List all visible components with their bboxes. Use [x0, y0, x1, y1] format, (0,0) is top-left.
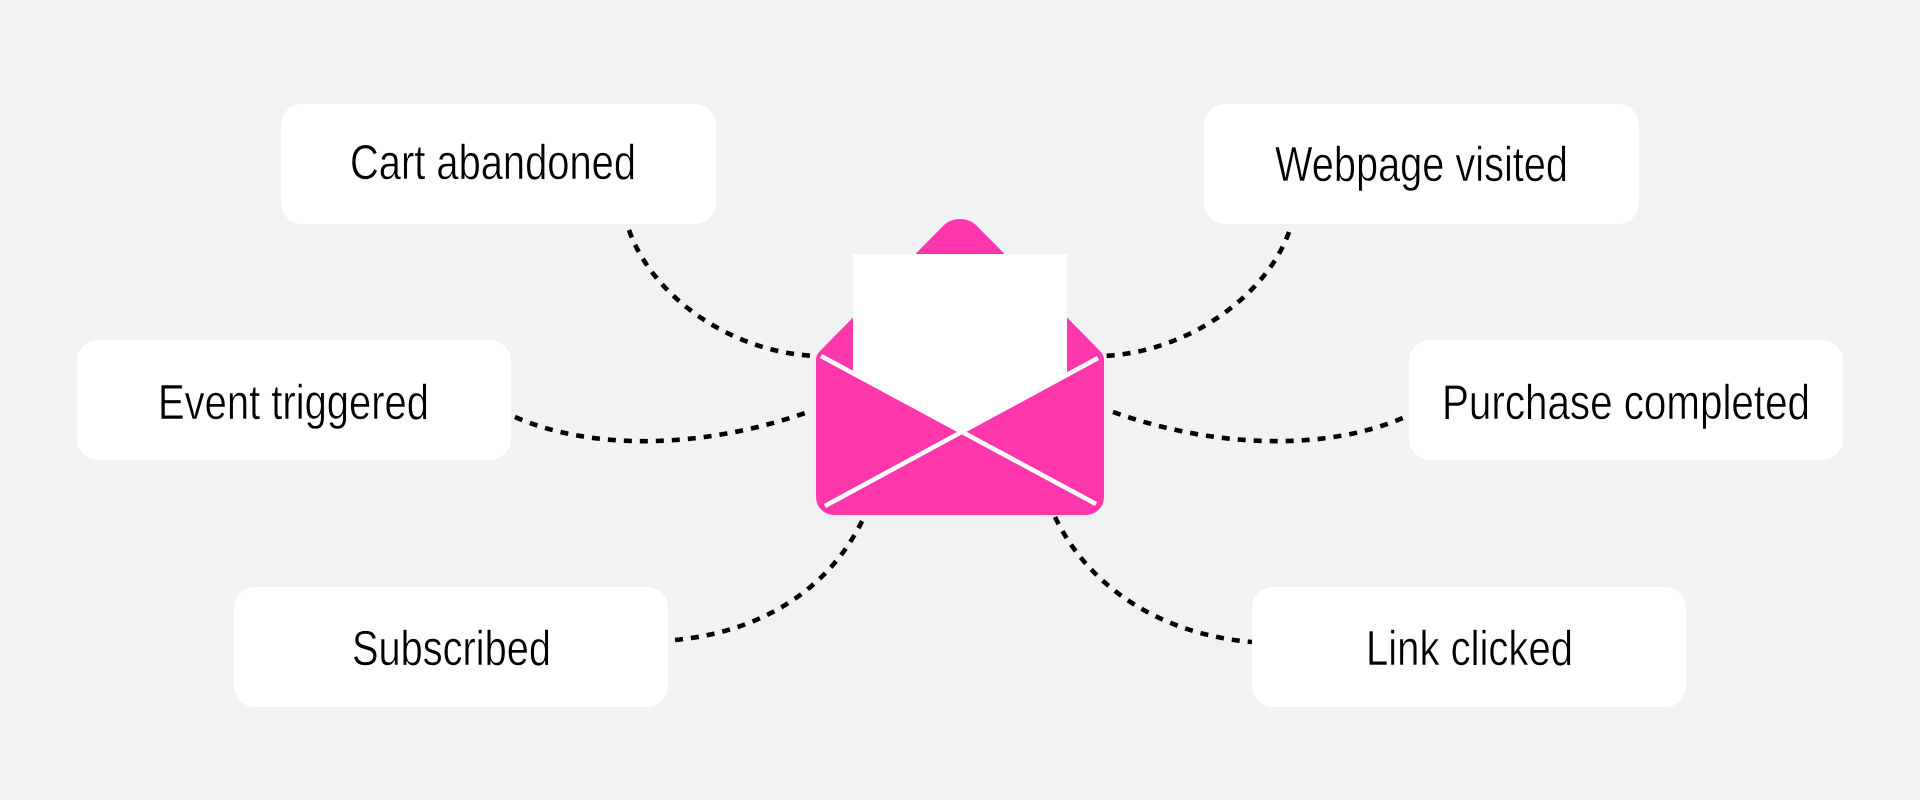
box: event triggered [77, 340, 511, 460]
connector: cart abandoned to envelope [629, 230, 815, 356]
connector: link clicked to envelope [1055, 517, 1252, 642]
box: event triggered: Event triggered [158, 376, 429, 430]
connector: subscribed to envelope [675, 517, 864, 640]
connector: webpage visited to envelope [1104, 232, 1289, 356]
envelope fold lines [821, 356, 1098, 506]
box: subscribed: Subscribed [352, 622, 551, 676]
box: cart abandoned [281, 104, 716, 224]
box: cart abandoned: Cart abandoned [350, 136, 636, 190]
connector: purchase completed to envelope [1113, 412, 1405, 441]
box: link clicked: Link clicked [1366, 622, 1573, 676]
box: subscribed [234, 587, 668, 707]
box: webpage visited [1204, 104, 1639, 224]
box: purchase completed [1409, 340, 1843, 460]
letter paper [853, 254, 1067, 432]
box: link clicked [1252, 587, 1686, 707]
box: purchase completed: Purchase completed [1442, 376, 1810, 430]
icon: open envelope with letter [816, 219, 1104, 515]
box: webpage visited: Webpage visited [1275, 138, 1568, 192]
connector: event triggered to envelope [515, 412, 808, 441]
envelope body and flap [816, 219, 1104, 515]
